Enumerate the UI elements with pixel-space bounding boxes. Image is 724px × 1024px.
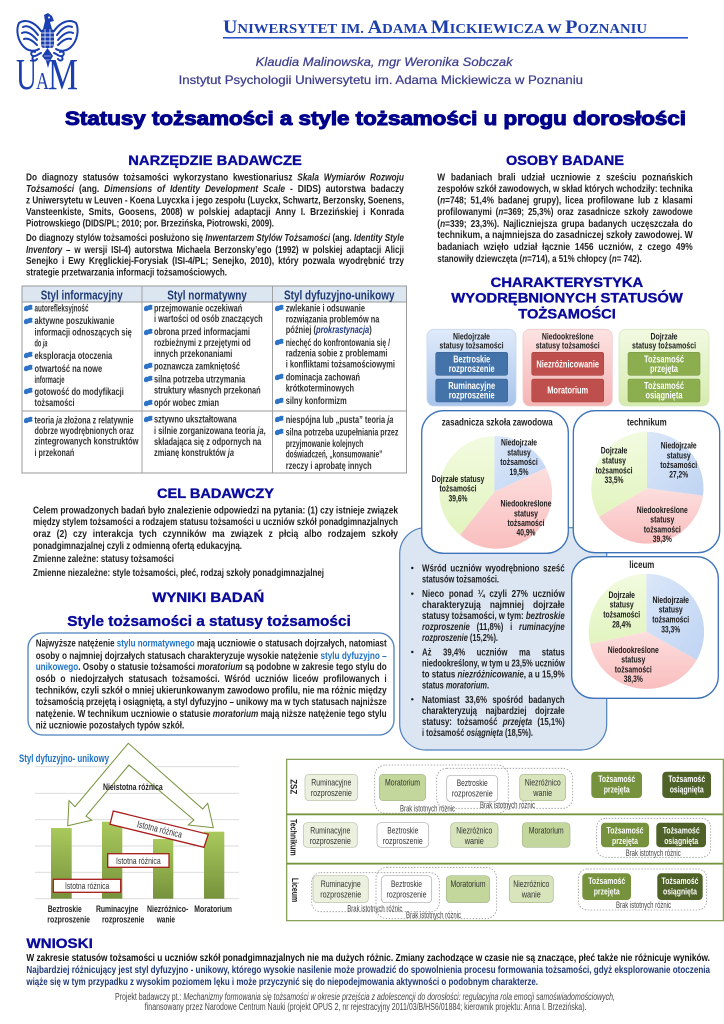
heading: charakterystyka statusów: CHARAKTERYSTYKA <box>491 274 643 290</box>
row: ZSZ: wanie <box>532 788 552 799</box>
card: dojrzałe statusy <box>619 329 709 406</box>
row: Technikum: rozproszenie <box>310 836 351 847</box>
row: Liceum: Brak istotnych różnic <box>616 900 671 910</box>
pie panel: liceum: statusy <box>610 600 634 611</box>
text block: osoby badane: stanowiły dziewczęta (n=714), a 51% chłopcy (n= 742). <box>437 254 642 265</box>
column: styl informacyjny: informacje <box>34 375 65 386</box>
row: ZSZ: Moratorium <box>385 778 420 788</box>
pie panel: technikum: statusy <box>602 455 627 466</box>
column: styl informacyjny: otwartość na nowe <box>34 364 103 375</box>
title: Statusy tożsamości a style tożsamości u progu dorosłości <box>65 109 686 130</box>
column: styl informacyjny: i przekonań <box>34 448 74 459</box>
text block: wnioski <box>26 953 710 988</box>
text block: narzędzie badawcze: strategie przetwarzania informacji tożsamościowych. <box>26 268 227 278</box>
panel: summary blob: niedookreślony, w tym u 23,5% uczniów <box>422 658 565 670</box>
column: styl dyfuzyjno-unikowy: niespójna lub „pusta” teoria ja <box>286 415 394 426</box>
pie panel: liceum: statusy <box>659 605 683 616</box>
row: ZSZ: osiągnięta <box>670 785 704 796</box>
callout: istotna różnica C <box>110 811 208 847</box>
column: styl informacyjny: informacji odnoszących się <box>34 328 132 338</box>
pie panel: technikum: technikum <box>627 418 667 428</box>
column: styl informacyjny <box>24 304 139 459</box>
card: niedookreślone statusy: Niezróżnicowanie <box>536 359 599 370</box>
row: ZSZ: Tożsamość <box>598 774 635 785</box>
column: styl informacyjny: dobrze wyodrębnionych oraz <box>34 426 134 437</box>
bar chart: styl dyfuzyjno-unikowy <box>19 743 239 926</box>
table headers: Styl informacyjny <box>41 288 123 302</box>
panel: wyniki callout: tożsamością przejętą i osiągniętą, a styl dyfuzyjno – unikowy ma w tych statusach najniższe <box>36 697 387 708</box>
panel: summary blob: charakteryzują najmniej dojrzałe <box>422 600 565 611</box>
panel: summary blob: status moratorium. <box>422 680 489 692</box>
pie panel: technikum <box>573 411 720 553</box>
panel: wyniki callout: techników, czyli szkół o mniej ukierunkowanym zawodowo profilu, nie ma różnic między <box>36 686 387 696</box>
column: styl normatywny: składająca się z odpornych na <box>154 437 262 448</box>
panel: wyniki callout: Najwyższe natężenie stylu normatywnego mają uczniowie o statusach dojrzałych, natomiast <box>36 638 387 650</box>
pie panel: zasadnicza szkoła zawodowa: 19,5% <box>510 467 529 478</box>
pie panel: zasadnicza szkoła zawodowa: 39,6% <box>448 493 468 504</box>
panel: wyniki callout: osoby o najmniej dojrzałych statusach charakteryzuje wysokie natężenie stylu dyfuzyjno – <box>36 651 387 662</box>
column: styl normatywny: silna potrzeba utrzymania <box>154 374 246 386</box>
row: Liceum: wanie <box>521 890 541 900</box>
callout: istotna różnica A <box>53 879 121 892</box>
card: dojrzałe statusy: przejęta <box>650 364 678 375</box>
heading: osoby badane: OSOBY BADANE <box>506 152 624 168</box>
panel: wyniki callout: niż uczniowie pozostałych typów szkół. <box>36 720 184 732</box>
institute: Instytut Psychologii Uniwersytetu im. Adama Mickiewicza w Poznaniu <box>179 73 583 87</box>
column: styl normatywny: sztywno ukształtowana <box>154 414 237 426</box>
text block: narzędzie badawcze: Vansteenkiste, Smits, Goosens, 2008) w polskiej adaptacji Anny I. Brzezińskiej i Konrada <box>26 207 404 218</box>
card: dojrzałe statusy: Tożsamość <box>644 381 684 392</box>
column: styl normatywny: przejmowanie oczekiwań <box>154 304 242 314</box>
card: niedojrzałe statusy: statusy tożsamości <box>440 341 504 352</box>
axis labels: rozproszenie <box>102 915 144 926</box>
pie panel: technikum: Dojrzałe <box>601 445 627 456</box>
row: Technikum <box>288 818 711 858</box>
pie panel: technikum: Niedookreślone <box>637 505 688 516</box>
card: niedojrzałe statusy <box>427 329 516 406</box>
text block: narzędzie badawcze: Inventory – w wersji ISI-4) autorstwa Michaela Berzonsky’ego (1992) w polskiej adaptacji Alicji <box>26 245 404 256</box>
heading: style a statusy: Style tożsamości a statusy tożsamości <box>67 613 351 630</box>
panel: wyniki callout: osób o niedojrzałych statusach tożsamości. Wśród uczniów liceów profilowanych i <box>36 674 387 685</box>
authors: Klaudia Malinowska, mgr Weronika Sobczak <box>256 55 514 69</box>
row: Liceum: osiągnięta <box>663 887 698 898</box>
pie panel: liceum: tożsamości <box>603 610 640 621</box>
axis labels: rozproszenie <box>47 915 90 926</box>
pie panel: technikum: tożsamości <box>644 524 681 535</box>
panel: summary blob: Nieco ponad ¼ czyli 27% uczniów <box>422 589 565 600</box>
column: styl dyfuzyjno-unikowy: krótkoterminowych <box>286 384 354 394</box>
panel: summary blob: rozproszenie (15,2%). <box>422 633 498 644</box>
row: Liceum: Beztroskie <box>391 879 422 890</box>
row: Liceum: Tożsamość <box>588 876 625 887</box>
pie panel: liceum: 28,4% <box>612 619 632 630</box>
text block: cel badawczy <box>33 506 398 579</box>
pie panel: zasadnicza szkoła zawodowa: statusy <box>514 508 539 519</box>
pie panel: liceum <box>572 557 718 698</box>
text block: narzędzie badawcze: Tożsamości (ang. Dimensions of Identity Development Scale - DIDS) autorstwa badaczy <box>26 184 404 195</box>
pie panel: liceum: Niedojrzałe <box>652 595 689 606</box>
pie panel: technikum: 27,2% <box>669 470 689 481</box>
card: dojrzałe statusy: Tożsamość <box>644 354 684 365</box>
text block: cel badawczy: oraz (2) czy interakcja tych czynników ma związek z płcią albo rodzajem szkoły <box>33 529 398 540</box>
row: ZSZ: Brak istotnych różnic <box>480 800 535 810</box>
column: styl dyfuzyjno-unikowy: radzenia sobie z problemami <box>286 348 388 360</box>
heading: charakterystyka statusów: WYODRĘBNIONYCH STATUSÓW <box>451 288 684 306</box>
row: Technikum: Niezróżnico <box>456 826 492 836</box>
card: niedojrzałe statusy: rozproszenie <box>449 390 495 402</box>
text block: osoby badane <box>437 172 693 265</box>
table headers: Styl dyfuzyjno-unikowy <box>284 288 395 302</box>
column: styl informacyjny: do ja <box>34 338 48 350</box>
card: niedojrzałe statusy: Ruminacyjne <box>448 381 496 392</box>
icon: university logo UAM: U <box>16 50 37 99</box>
bar chart: styl dyfuzyjno-unikowy: Nieistotna różnica <box>103 782 163 793</box>
axis labels: Beztroskie <box>48 904 82 915</box>
panel: summary blob: Aż 39,4% uczniów ma status <box>422 648 565 658</box>
pie panel: liceum: liceum <box>629 560 654 571</box>
column: styl dyfuzyjno-unikowy <box>275 304 398 472</box>
column: styl dyfuzyjno-unikowy: przyjmowanie kolejnych <box>286 439 363 450</box>
column: styl normatywny: poznawcza zamkniętość <box>154 362 240 372</box>
row: ZSZ: ZSZ <box>288 779 298 794</box>
table headers <box>41 288 395 302</box>
row: Technikum: Beztroskie <box>387 826 418 836</box>
column: styl normatywny: innych przekonaniami <box>154 349 232 360</box>
pie panel: technikum: statusy <box>667 450 691 461</box>
card: niedookreślone statusy: statusy tożsamości <box>536 341 600 352</box>
card: niedookreślone statusy <box>523 329 612 406</box>
row: Technikum: wanie <box>464 836 484 847</box>
column: styl informacyjny: gotowość do modyfikacji <box>34 387 124 398</box>
pie panel: technikum: tożsamości <box>660 460 697 471</box>
column: styl dyfuzyjno-unikowy: silna potrzeba uzupełniania przez <box>286 428 398 438</box>
row: ZSZ: Tożsamość <box>668 774 705 785</box>
pie panel: zasadnicza szkoła zawodowa: zasadnicza szkoła zawodowa <box>442 418 553 428</box>
row: ZSZ: rozproszenie <box>452 788 493 800</box>
icon: university logo UAM: A <box>36 69 49 95</box>
heading: cel badawczy: CEL BADAWCZY <box>157 485 275 501</box>
heading: wnioski: WNIOSKI <box>26 935 93 951</box>
row: Technikum: rozproszenie <box>383 836 423 847</box>
axis labels: Moratorium <box>194 904 232 915</box>
column: styl informacyjny: eksploracja otoczenia <box>34 351 113 362</box>
university name header: UNIWERSYTET IM. ADAMA MICKIEWICZA W POZNANIU <box>223 17 647 38</box>
pie panel: liceum: 38,3% <box>624 674 643 685</box>
column: styl dyfuzyjno-unikowy: doświadczeń, „konsumowanie” <box>286 450 382 460</box>
row: Liceum: przejęta <box>594 887 620 898</box>
icon: university logo UAM: M <box>48 50 78 99</box>
pie panel: zasadnicza szkoła zawodowa: Niedookreślone <box>500 499 552 510</box>
footer: project note <box>115 992 615 1013</box>
row: Liceum: Brak istotnych różnic <box>347 904 403 914</box>
text block: narzędzie badawcze: Piotrowskiego (DIDS/PL; 2010; por. Brzezińska, Piotrowski, 2009). <box>26 218 274 230</box>
chart title: Styl dyfuzyjno- unikowy <box>19 753 110 765</box>
column: styl informacyjny: autorefleksyjność <box>34 304 89 314</box>
column: styl dyfuzyjno-unikowy: rzeczy i aprobatę innych <box>286 461 372 472</box>
column: styl normatywny: zmianę konstruktów ja <box>154 448 234 459</box>
row: ZSZ: Beztroskie <box>457 778 488 789</box>
text block: narzędzie badawcze: Do diagnozy stylów tożsamości posłużono się Inwentarzem Stylów Tożsamości (ang. Identity Style <box>26 233 404 244</box>
text block: cel badawczy: Zmienne niezależne: style tożsamości, płeć, rodzaj szkoły ponadgimnazjalnej <box>33 568 324 579</box>
row: Liceum: Brak istotnych różnic <box>406 910 461 920</box>
column: styl dyfuzyjno-unikowy: później (prokrastynacja) <box>286 325 372 336</box>
panel: summary blob: charakteryzują najbardziej dojrzałe <box>422 706 565 717</box>
pie panel: liceum: statusy <box>621 655 646 666</box>
pie panel: zasadnicza szkoła zawodowa: tożsamości <box>440 484 476 495</box>
column: styl dyfuzyjno-unikowy: zwlekanie i odsuwanie <box>286 304 365 314</box>
row: Technikum: Moratorium <box>529 826 564 836</box>
row: ZSZ: Ruminacyjne <box>311 778 351 788</box>
panel: summary blob: to status niezróżnicowanie, a u 15,9% <box>422 670 565 680</box>
column: styl normatywny: rozbieżnymi z przejętymi od <box>154 338 251 349</box>
pie panel: zasadnicza szkoła zawodowa: tożsamości <box>500 457 538 468</box>
column: styl normatywny <box>144 304 266 459</box>
pie panel: liceum: tożsamości <box>652 615 689 626</box>
row: Technikum: Brak istotnych różnic <box>626 848 681 858</box>
row: Technikum: osiągnięta <box>664 836 699 847</box>
panel: summary blob <box>400 528 607 750</box>
row: Technikum: Tożsamość <box>663 825 700 836</box>
callout: istotna różnica B <box>108 854 169 867</box>
text block: narzędzie badawcze: Senejko i Ewy Kręglickiej-Forysiak (ISI-4/PL; Senejko, 2010), który pozwala wyodrębnić trzy <box>26 256 404 267</box>
row: Technikum: Ruminacyjne <box>310 826 350 836</box>
card: niedojrzałe statusy: Niedojrzałe <box>453 332 490 342</box>
row: Liceum: rozproszenie <box>386 890 426 900</box>
bars <box>51 822 224 899</box>
column: styl informacyjny: aktywne poszukiwanie <box>34 316 115 327</box>
pie panel: technikum: tożsamości <box>596 465 632 476</box>
row: Liceum <box>289 867 707 920</box>
axis labels: wanie <box>156 915 175 926</box>
row: Liceum: Tożsamość <box>662 876 698 887</box>
card: niedojrzałe statusy: Beztroskie <box>453 354 491 365</box>
pie panel: liceum: 33,3% <box>661 624 681 635</box>
row: Technikum: Technikum <box>288 819 298 856</box>
card: dojrzałe statusy: Dojrzałe <box>650 332 678 342</box>
panel: wyniki callout: unikowego. Osoby o statusie tożsamości moratorium są podobne w zakresie tego stylu do <box>36 662 387 673</box>
icon: university logo UAM <box>16 13 78 99</box>
text block: narzędzie badawcze: z Uniwersytetu w Leuven - Koena Luycxka i jego zespołu (Luyckx, Schwartz, Berzonsky, Soenens, <box>26 196 404 206</box>
panel: table of identity styles <box>22 286 406 473</box>
card: dojrzałe statusy: statusy tożsamości <box>632 341 696 352</box>
row: Liceum: Liceum <box>289 878 300 902</box>
pie panel: zasadnicza szkoła zawodowa: tożsamości <box>508 518 544 529</box>
pie panel: zasadnicza szkoła zawodowa <box>422 411 568 553</box>
pie panel: technikum: 33,5% <box>604 475 624 486</box>
column: styl informacyjny: zintegrowanych konstruktów <box>34 436 139 448</box>
pie panel: zasadnicza szkoła zawodowa: Dojrzałe statusy <box>432 474 485 485</box>
row: ZSZ: Brak istotnych różnic <box>400 804 455 814</box>
text block: cel badawczy: ponadgimnazjalnej czyli z odmienną ofertą edukacyjną. <box>33 541 242 552</box>
pie panel: liceum: Dojrzałe <box>608 590 635 601</box>
column: styl normatywny: i silnie zorganizowana teoria ja, <box>154 426 266 437</box>
pie panel: liceum: Niedookreślone <box>608 645 659 656</box>
column: styl normatywny: i wartości od osób znaczących <box>154 314 263 325</box>
text block: narzędzie badawcze <box>26 172 404 278</box>
axis labels <box>47 904 232 926</box>
row: Technikum: Tożsamość <box>606 825 644 836</box>
pie panel: technikum: statusy <box>650 515 675 526</box>
column: styl dyfuzyjno-unikowy: rozwiązania problemów na <box>286 314 380 326</box>
text block: cel badawczy: między stylem tożsamości a rodzajem statusu tożsamości u uczniów szkół ponadgimnazjalnych <box>33 517 398 528</box>
row: Technikum: przejęta <box>612 836 639 847</box>
text block: wnioski: wiąże się w tym przypadku z wysokim poziomem lęku i może przyczynić się do niepodejmowania aktywności o podobnym charakterze. <box>26 977 538 988</box>
card: niedookreślone statusy: Moratorium <box>547 386 588 396</box>
row: Liceum: Ruminacyjne <box>321 879 361 890</box>
panel: summary blob: statusy: tożsamość przejęta (15,1%) <box>422 717 565 728</box>
heading: wyniki badań: WYNIKI BADAŃ <box>152 589 264 605</box>
column: styl dyfuzyjno-unikowy: silny konformizm <box>286 396 347 407</box>
panel: summary blob: Natomiast 33,6% spośród badanych <box>422 695 565 706</box>
callout: istotna różnica B: Istotna różnica <box>116 856 161 867</box>
column: styl normatywny: struktury własnych przekonań <box>154 386 261 396</box>
row: ZSZ: rozproszenie <box>311 788 352 799</box>
text block: cel badawczy: Zmienne zależne: statusy tożsamości <box>33 554 174 565</box>
panel: summary blob: statusów tożsamości. <box>422 574 499 586</box>
card: niedookreślone statusy: Niedookreślone <box>542 332 594 342</box>
column: styl normatywny: opór wobec zmian <box>154 398 219 409</box>
axis labels: Niezróżnico- <box>147 904 188 915</box>
row: ZSZ <box>288 765 711 814</box>
column: styl dyfuzyjno-unikowy: niechęć do konfrontowania się / <box>286 338 390 349</box>
panel: summary blob: Wśród uczniów wyodrębniono sześć <box>422 564 565 574</box>
callout: istotna różnica C: Istotna różnica <box>136 819 184 841</box>
pie panel: technikum: 39,3% <box>653 534 672 545</box>
heading: narzędzie badawcze: NARZĘDZIE BADAWCZE <box>128 152 302 168</box>
column: styl informacyjny: tożsamości <box>34 398 75 409</box>
text block: narzędzie badawcze: Do diagnozy statusów tożsamości wykorzystano kwestionariusz Skala Wymiarów Rozwoju <box>26 172 404 184</box>
panel: wyniki callout <box>28 633 394 735</box>
panel: summary blob: statusy tożsamości, w tym: beztroskie <box>422 611 565 622</box>
row: Liceum: Niezróżnico <box>513 879 549 890</box>
row: Liceum: Moratorium <box>450 879 486 890</box>
table headers: Styl normatywny <box>167 288 247 302</box>
column: styl dyfuzyjno-unikowy: dominacja zachowań <box>286 372 360 384</box>
card: dojrzałe statusy: osiągnięta <box>646 390 683 402</box>
row: Liceum: rozproszenie <box>320 890 361 900</box>
column: styl dyfuzyjno-unikowy: i konfliktami tożsamościowymi <box>286 360 395 370</box>
panel: status comparison matrix <box>287 759 723 921</box>
panel: summary blob: rozproszenie (11,8%) i ruminacyjne <box>422 622 565 633</box>
pie panel: technikum: Niedojrzałe <box>661 440 697 451</box>
pie panel: zasadnicza szkoła zawodowa: 40,9% <box>516 528 536 539</box>
panel: summary blob: i tożsamość osiągnięta (18,5%). <box>422 728 533 739</box>
heading: charakterystyka statusów: TOŻSAMOŚCI <box>518 304 616 322</box>
heading: charakterystyka statusów <box>451 274 684 322</box>
axis labels: Ruminacyjne <box>96 904 138 915</box>
column: styl informacyjny: teoria ja złożona z relatywnie <box>34 416 134 426</box>
pie panel: zasadnicza szkoła zawodowa: Niedojrzałe <box>501 438 537 449</box>
arrow: nieistotna różnica <box>68 743 213 828</box>
row: ZSZ: przejęta <box>604 785 630 796</box>
callout: istotna różnica A: Istotna różnica <box>65 881 110 892</box>
text block: cel badawczy: Celem prowadzonych badań było znalezienie odpowiedzi na pytania: (1) czy istnieje związek <box>33 506 398 516</box>
column: styl normatywny: obrona przed informacjami <box>154 327 250 338</box>
pie panel: zasadnicza szkoła zawodowa: statusy <box>507 447 531 458</box>
panel: wyniki callout: natężenie. W technikum uczniowie o statusie moratorium mają niższe natężenie tego stylu <box>36 709 387 720</box>
row: ZSZ: Niezróżnico <box>525 778 561 788</box>
card: niedojrzałe statusy: rozproszenie <box>449 364 495 375</box>
pie panel: liceum: tożsamości <box>615 664 652 675</box>
